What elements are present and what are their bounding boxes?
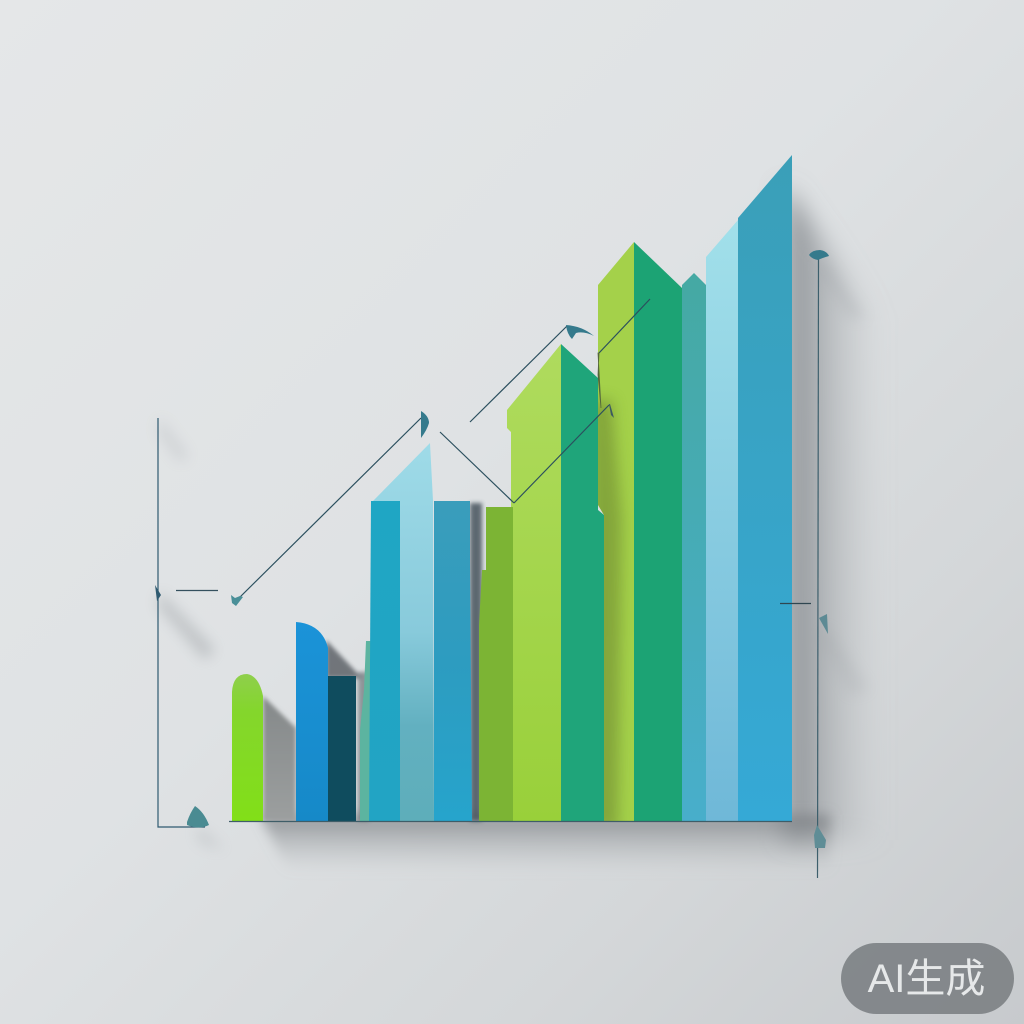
- bar: tall green tower: [598, 242, 682, 821]
- marker: trend upper: [566, 325, 594, 339]
- bar: teal and light blue tower: [360, 443, 472, 821]
- marker: trend right: [609, 404, 614, 418]
- trend line with markers: [231, 299, 650, 606]
- marker: right axis bottom: [814, 825, 826, 848]
- bar: green tower: [479, 344, 604, 821]
- bar: lime rounded: [232, 674, 263, 821]
- marker: right axis top: [809, 250, 829, 260]
- marker: trend start: [231, 595, 243, 606]
- tower shading: [590, 400, 622, 830]
- bar: blue rounded with dark side: [296, 622, 356, 821]
- badge: AI generated: [841, 943, 1014, 1014]
- left axis: [155, 418, 218, 828]
- marker: left axis: [155, 585, 161, 601]
- bar: tallest blue tower: [682, 155, 792, 821]
- bar shadows: [158, 185, 880, 875]
- right axis: [780, 250, 829, 878]
- bar chart: [232, 155, 792, 830]
- marker: trend peak: [421, 411, 429, 438]
- marker: right axis middle: [819, 614, 828, 634]
- badge: AI generated: AI生成: [868, 957, 985, 1001]
- seam: tower edge: [598, 353, 601, 408]
- baseline: [229, 820, 792, 822]
- marker: left axis base: [187, 806, 209, 828]
